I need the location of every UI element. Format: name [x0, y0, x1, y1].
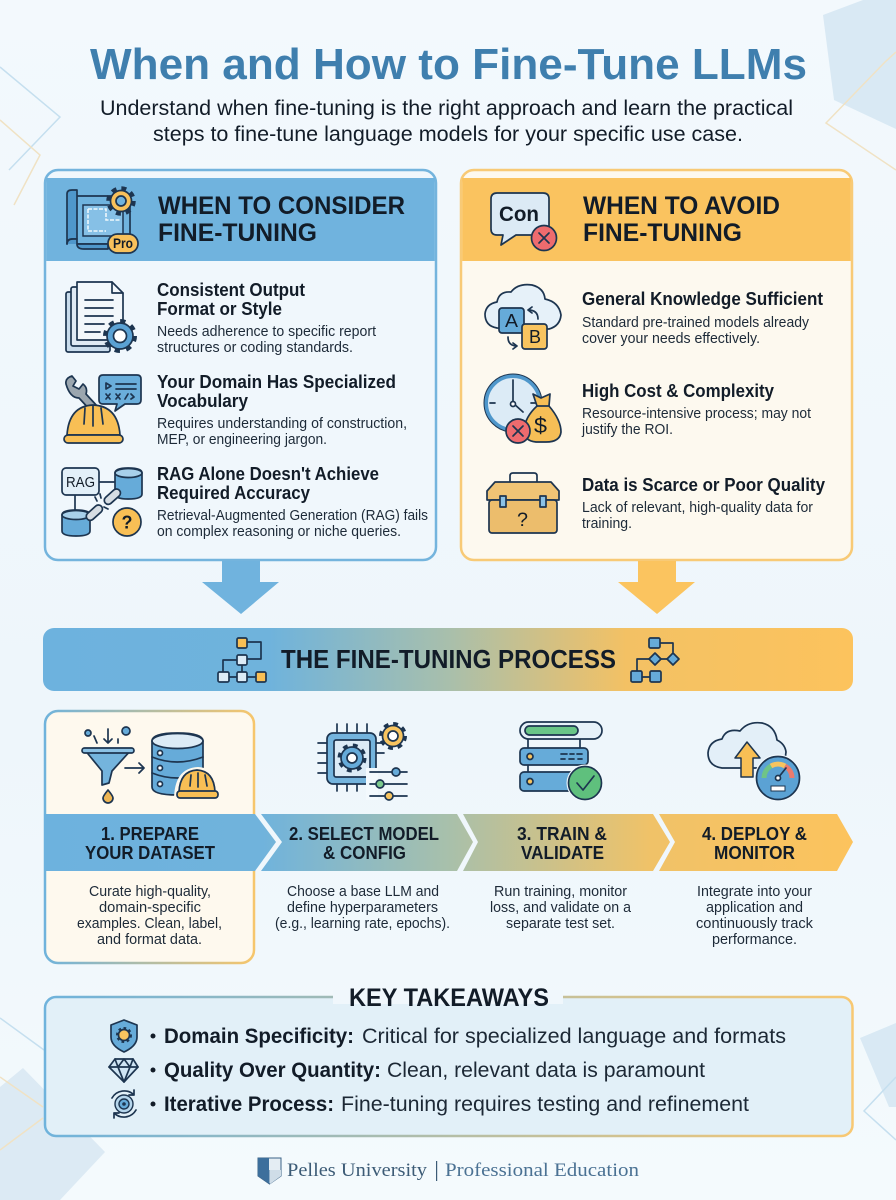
heading: KEY TAKEAWAYS [349, 984, 549, 1012]
icon: wrench, code bubble and hard hat [64, 375, 141, 443]
step 1 description [77, 884, 222, 948]
icon: diamond [109, 1059, 138, 1082]
icon: funnel, database and hard hat [82, 727, 221, 803]
icon: clock and money bag: $ [534, 413, 547, 438]
icon: cloud with A and B: B [529, 327, 541, 347]
icon: shield [111, 1020, 137, 1052]
icon: RAG broken link: ? [122, 512, 132, 532]
text: RAG alone: Retrieval-Augmented Generation (RAG) fails [157, 508, 428, 524]
text: specialized vocabulary: MEP, or engineering jargon. [157, 432, 327, 448]
step 1 description: and format data. [97, 932, 202, 948]
step 3 label: 3. TRAIN & [517, 824, 607, 844]
text: high cost: justify the ROI. [581, 422, 673, 438]
icon: toolbox with question mark: ? [517, 510, 528, 531]
text: RAG alone: Required Accuracy [157, 483, 310, 503]
takeaway 2: Quality Over Quantity: [164, 1059, 381, 1082]
text: specialized vocabulary: Vocabulary [157, 391, 248, 411]
heading: THE FINE-TUNING PROCESS [281, 644, 616, 674]
step 3 description: separate test set. [506, 916, 615, 932]
step 3 label [517, 824, 607, 863]
footer text: Professional Education [445, 1160, 640, 1181]
text: data scarce: Data is Scarce or Poor Quality [582, 475, 825, 495]
text: consistent output: Format or Style [157, 299, 282, 319]
takeaway 1 [150, 1025, 786, 1048]
icon: flowchart left [218, 638, 266, 682]
icon: documents with gear [66, 282, 134, 352]
subtitle: steps to fine-tune language models for your specific use case. [153, 122, 743, 146]
step 1 description: domain-specific [99, 900, 201, 916]
step 1 description: examples. Clean, label, [77, 916, 222, 932]
icon: Con speech bubble with cross: Con [499, 203, 539, 226]
step 2 label: & CONFIG [323, 843, 406, 863]
heading [158, 192, 405, 247]
icon: RAG broken link: RAG [66, 474, 95, 491]
takeaway 2: Clean, relevant data is paramount [387, 1059, 705, 1082]
step 2 description: define hyperparameters [287, 900, 438, 916]
step 2 description [275, 884, 450, 932]
step 3 description: Run training, monitor [494, 884, 627, 900]
step 1 label [85, 824, 215, 863]
takeaway 1: Critical for specialized language and formats [362, 1025, 786, 1048]
step 1 description: Curate high-quality, [89, 884, 211, 900]
text: specialized vocabulary [157, 372, 407, 448]
text: RAG alone: RAG Alone Doesn't Achieve [157, 464, 379, 484]
takeaway 2 [150, 1059, 705, 1082]
icon: cloud with A and B [485, 285, 561, 349]
icon: RAG broken link [62, 468, 142, 536]
text: specialized vocabulary: Your Domain Has Specialized [157, 372, 396, 392]
arrow: right down arrow [618, 561, 695, 614]
step 2 label [289, 824, 439, 863]
step 4 label: MONITOR [714, 843, 795, 863]
text: consistent output: Consistent Output [157, 280, 305, 300]
icon: university shield [258, 1158, 281, 1184]
step 4 description: application and [706, 900, 803, 916]
text: RAG alone [157, 464, 428, 540]
title: When and How to Fine-Tune LLMs [90, 40, 807, 89]
icon: cloud with A and B: A [505, 311, 518, 331]
takeaway 3: Fine-tuning requires testing and refinement [341, 1093, 749, 1116]
divider [436, 1161, 437, 1181]
takeaway 1: Domain Specificity: [164, 1025, 354, 1048]
step 4 label [702, 824, 807, 863]
step 4 description: Integrate into your [697, 884, 812, 900]
step 2 description: (e.g., learning rate, epochs). [275, 916, 450, 932]
icon: iterative target [112, 1090, 136, 1118]
icon: servers with check [520, 722, 604, 802]
process chevrons [44, 814, 853, 871]
step 2 description: Choose a base LLM and [287, 884, 439, 900]
subtitle: Understand when fine-tuning is the right approach and learn the practical [100, 96, 793, 120]
text: general knowledge: General Knowledge Sufficient [582, 289, 823, 309]
panel: when to consider fine-tuning [45, 170, 436, 560]
text: consistent output: Needs adherence to specific report [157, 324, 376, 340]
step 4 label: 4. DEPLOY & [702, 824, 807, 844]
takeaway 3: Iterative Process: [164, 1093, 334, 1116]
text: high cost [581, 381, 811, 438]
text: specialized vocabulary: Requires understanding of construction, [157, 416, 407, 432]
text: high cost: High Cost & Complexity [582, 381, 774, 401]
takeaway 3 [150, 1093, 749, 1116]
text: RAG alone: on complex reasoning or niche queries. [157, 524, 401, 540]
heading: FINE-TUNING [158, 219, 317, 247]
step 1 box [45, 711, 254, 963]
text: consistent output: structures or coding standards. [157, 340, 353, 356]
icon: flowchart right [631, 638, 679, 682]
subtitle [100, 96, 793, 146]
icon: clock and money bag [484, 374, 561, 443]
heading [583, 192, 780, 247]
panel: key takeaways [45, 984, 852, 1136]
step 4 description: performance. [712, 932, 797, 948]
arrow: left down arrow [202, 561, 279, 614]
text: consistent output [157, 280, 376, 356]
step 4 description [696, 884, 814, 948]
step 2 label: 2. SELECT MODEL [289, 824, 439, 844]
icon: chip with gear and sliders [318, 724, 407, 800]
text: general knowledge [582, 289, 823, 347]
banner: the fine-tuning process [43, 628, 853, 691]
icon: toolbox with question mark [487, 473, 559, 533]
step 4 description: continuously track [696, 916, 814, 932]
icon: Con speech bubble with cross [491, 193, 556, 250]
icon: cloud upload with gauge [708, 723, 802, 802]
heading: WHEN TO AVOID [583, 192, 780, 220]
footer text: Pelles University [287, 1160, 428, 1181]
text: data scarce: Lack of relevant, high-quality data for [582, 500, 813, 516]
footer [258, 1158, 640, 1184]
text: high cost: Resource-intensive process; may not [582, 406, 811, 422]
text: general knowledge: cover your needs effectively. [582, 331, 760, 347]
step 1 label: 1. PREPARE [101, 824, 199, 844]
text: data scarce: training. [582, 516, 632, 532]
step 1 label: YOUR DATASET [85, 843, 215, 863]
text: data scarce [582, 475, 825, 532]
heading: WHEN TO CONSIDER [158, 192, 405, 220]
step 3 label: VALIDATE [521, 843, 604, 863]
icon: blueprint with gear and Pro badge: Pro [113, 236, 133, 251]
step 3 description: loss, and validate on a [490, 900, 632, 916]
icon: blueprint with gear and Pro badge [67, 190, 138, 253]
panel: when to avoid fine-tuning [461, 170, 852, 560]
heading: FINE-TUNING [583, 219, 742, 247]
step 3 description [490, 884, 632, 932]
text: general knowledge: Standard pre-trained models already [582, 315, 810, 331]
